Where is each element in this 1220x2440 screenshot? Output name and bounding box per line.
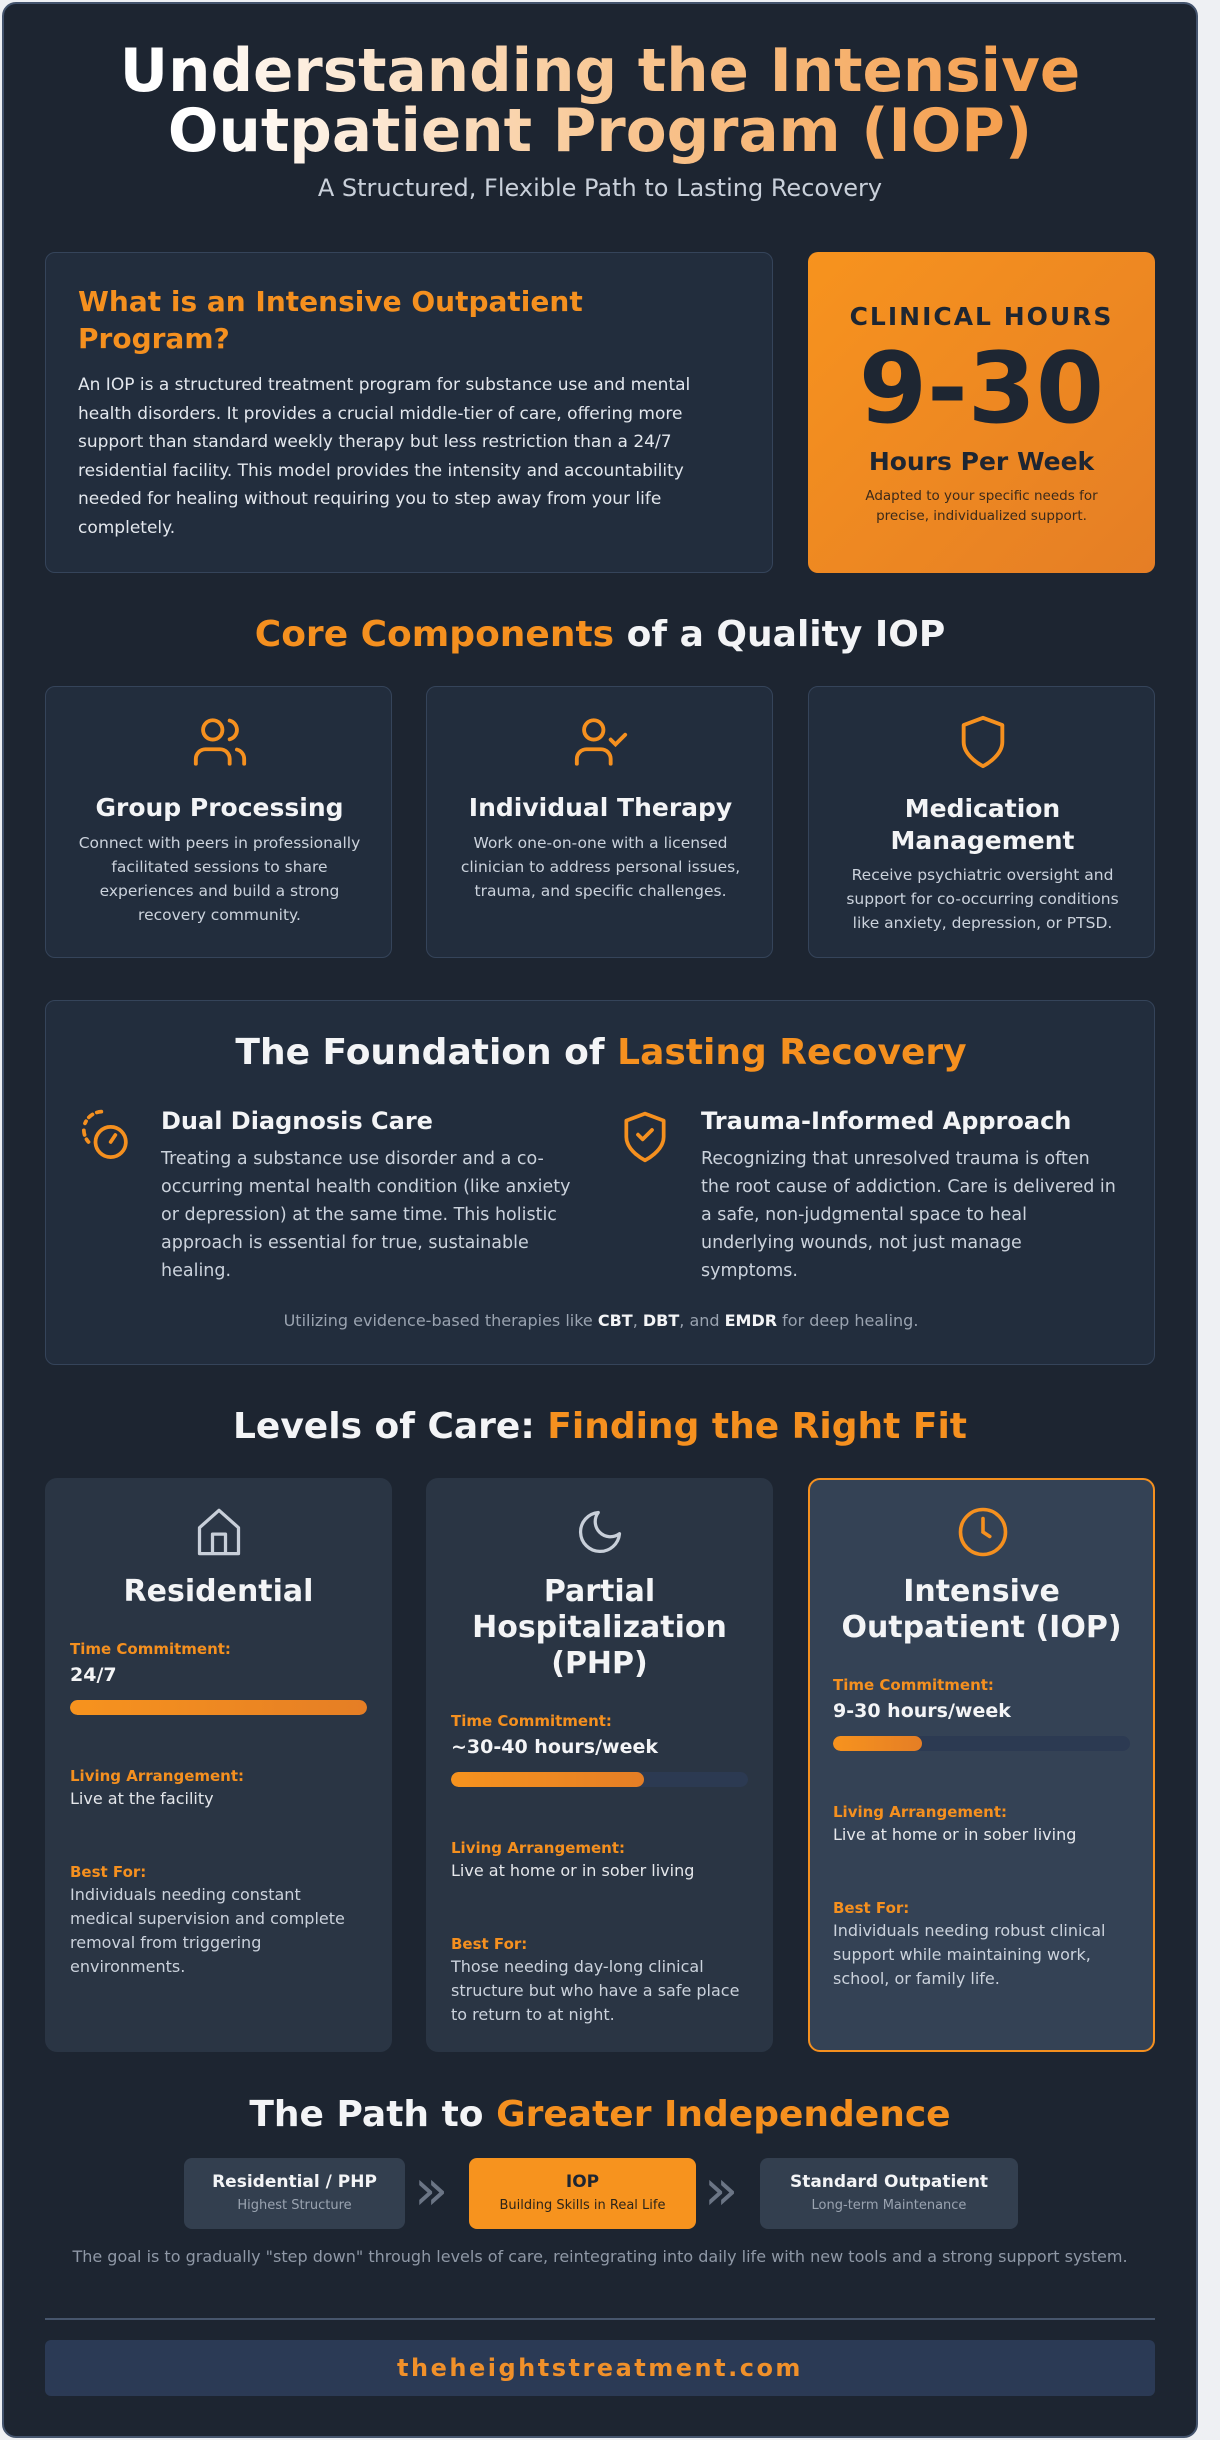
block: dual diagnosis: Treating a substance use disorder and a co-occurring mental health condition (like anxiety or depression) at the same time. This holistic approach is essential for true, sustainable healing. bbox=[161, 1149, 571, 1281]
card: individual therapy: Individual Therapy bbox=[469, 793, 732, 822]
card: IOP: Best For: bbox=[833, 1899, 909, 1917]
card: residential: Living Arrangement: bbox=[70, 1767, 244, 1785]
step: standard outpatient: Standard Outpatient bbox=[790, 2172, 988, 2192]
card: PHP bbox=[426, 1478, 773, 2052]
panel: what is IOP bbox=[45, 252, 773, 573]
card: residential: 24/7 bbox=[70, 1664, 117, 1686]
step: residential/php: Residential / PHP bbox=[212, 2172, 377, 2192]
card: PHP: Live at home or in sober living bbox=[451, 1861, 694, 1880]
card: PHP: Living Arrangement: bbox=[451, 1839, 625, 1857]
card: PHP: Best For: bbox=[451, 1935, 527, 1953]
icon: clock bbox=[958, 1508, 1008, 1556]
panel: clinical hours bbox=[808, 252, 1155, 573]
step: standard outpatient bbox=[760, 2158, 1018, 2229]
card: PHP: Those needing day-long clinical structure but who have a safe place to return to at night. bbox=[451, 1957, 739, 2024]
card: residential: Best For: bbox=[70, 1863, 146, 1881]
block: trauma informed: Trauma-Informed Approach bbox=[701, 1107, 1071, 1135]
block: trauma informed: Recognizing that unresolved trauma is often the root cause of addiction. Care is delivered in a safe, non-judgmental space to heal underlying wounds, not just manage symptoms. bbox=[701, 1149, 1116, 1281]
panel: clinical hours: CLINICAL HOURS bbox=[850, 302, 1113, 331]
card: IOP: Outpatient (IOP) bbox=[841, 1610, 1122, 1645]
card: residential: Residential bbox=[124, 1574, 313, 1609]
step: residential/php: Highest Structure bbox=[237, 2198, 352, 2213]
card: residential: Individuals needing constant medical supervision and complete removal from triggering environments. bbox=[70, 1885, 345, 1976]
step: IOP: Building Skills in Real Life bbox=[500, 2198, 665, 2213]
icon: dual diagnosis bbox=[82, 1110, 128, 1159]
heading: what is IOP: Program? bbox=[78, 322, 230, 355]
panel: foundation bbox=[45, 1000, 1155, 1365]
note: therapies: Utilizing evidence-based therapies like CBT, DBT, and EMDR for deep healing. bbox=[284, 1311, 918, 1330]
subtitle: A Structured, Flexible Path to Lasting Recovery bbox=[318, 174, 882, 202]
arrow: » bbox=[704, 2158, 738, 2223]
panel: clinical hours: Adapted to your specific needs for bbox=[865, 488, 1098, 504]
title: Outpatient Program (IOP) bbox=[168, 97, 1032, 166]
card: individual therapy bbox=[426, 686, 773, 958]
heading: levels of care: Levels of Care: Finding the Right Fit bbox=[233, 1406, 967, 1447]
card: IOP: Live at home or in sober living bbox=[833, 1825, 1076, 1844]
step: IOP: IOP bbox=[566, 2172, 599, 2192]
card: individual therapy: Work one-on-one with a licensed clinician to address personal issues, trauma, and specific challenges. bbox=[461, 834, 740, 900]
step: standard outpatient: Long-term Maintenance bbox=[812, 2198, 966, 2213]
icon: shield check bbox=[624, 1112, 666, 1162]
card: group processing bbox=[45, 686, 392, 958]
card: PHP: Partial bbox=[544, 1574, 655, 1609]
heading: what is IOP bbox=[78, 285, 583, 355]
footer bbox=[45, 2340, 1155, 2396]
panel: clinical hours: precise, individualized support. bbox=[876, 508, 1087, 524]
card: medication management: Receive psychiatric oversight and support for co-occurring conditions like anxiety, depression, or PTSD. bbox=[846, 866, 1119, 932]
card: residential bbox=[45, 1478, 392, 2052]
card: IOP: 9-30 hours/week bbox=[833, 1700, 1011, 1722]
card: medication management bbox=[808, 686, 1155, 958]
arrow: » bbox=[414, 2158, 448, 2223]
card: IOP: Intensive bbox=[903, 1574, 1060, 1609]
heading: what is IOP: What is an Intensive Outpatient bbox=[78, 285, 583, 318]
big number: 9-30 bbox=[859, 332, 1104, 446]
icon: shield bbox=[962, 716, 1004, 768]
panel: clinical hours: Hours Per Week bbox=[869, 447, 1094, 476]
icon: users bbox=[194, 718, 246, 766]
card: medication management: Medication bbox=[905, 794, 1060, 823]
title: Understanding the Intensive bbox=[120, 37, 1080, 106]
card: PHP: (PHP) bbox=[551, 1646, 648, 1681]
block: dual diagnosis: Dual Diagnosis Care bbox=[161, 1107, 433, 1135]
heading: core components: Core Components of a Quality IOP bbox=[255, 614, 945, 655]
card: IOP: Time Commitment: bbox=[833, 1676, 994, 1694]
step: IOP bbox=[469, 2158, 696, 2229]
icon: user check bbox=[574, 718, 628, 766]
text: IOP description: An IOP is a structured treatment program for substance use and mental health disorders. It provides a crucial middle-tier of care, offering more support than standard weekly therapy but less restriction than a 24/7 residential facility. This model provides the intensity and accountability needed for healing without requiring you to step away from your life completely. bbox=[78, 375, 690, 538]
heading: foundation: The Foundation of Lasting Recovery bbox=[235, 1032, 967, 1073]
card: group processing: Connect with peers in professionally facilitated sessions to share experiences and build a strong recovery community. bbox=[79, 834, 360, 924]
icon: house bbox=[198, 1508, 240, 1556]
card: IOP: Living Arrangement: bbox=[833, 1803, 1007, 1821]
icon: moon bbox=[578, 1510, 622, 1553]
card: residential: Time Commitment: bbox=[70, 1640, 231, 1658]
footer: theheightstreatment.com bbox=[397, 2354, 803, 2382]
card: IOP bbox=[808, 1478, 1155, 2052]
card: residential: Live at the facility bbox=[70, 1789, 214, 1808]
step: residential/php bbox=[184, 2158, 405, 2229]
card: IOP: Individuals needing robust clinical support while maintaining work, school, or family life. bbox=[833, 1921, 1105, 1988]
heading: path: The Path to Greater Independence bbox=[249, 2094, 951, 2135]
title bbox=[120, 37, 1080, 166]
card: medication management: Management bbox=[890, 826, 1075, 855]
card: PHP: Time Commitment: bbox=[451, 1712, 612, 1730]
card: PHP: ~30-40 hours/week bbox=[451, 1736, 658, 1758]
note: step down: The goal is to gradually "step down" through levels of care, reintegrating into daily life with new tools and a strong support system. bbox=[72, 2247, 1128, 2266]
card: group processing: Group Processing bbox=[95, 793, 344, 822]
card: PHP: Hospitalization bbox=[472, 1610, 727, 1645]
